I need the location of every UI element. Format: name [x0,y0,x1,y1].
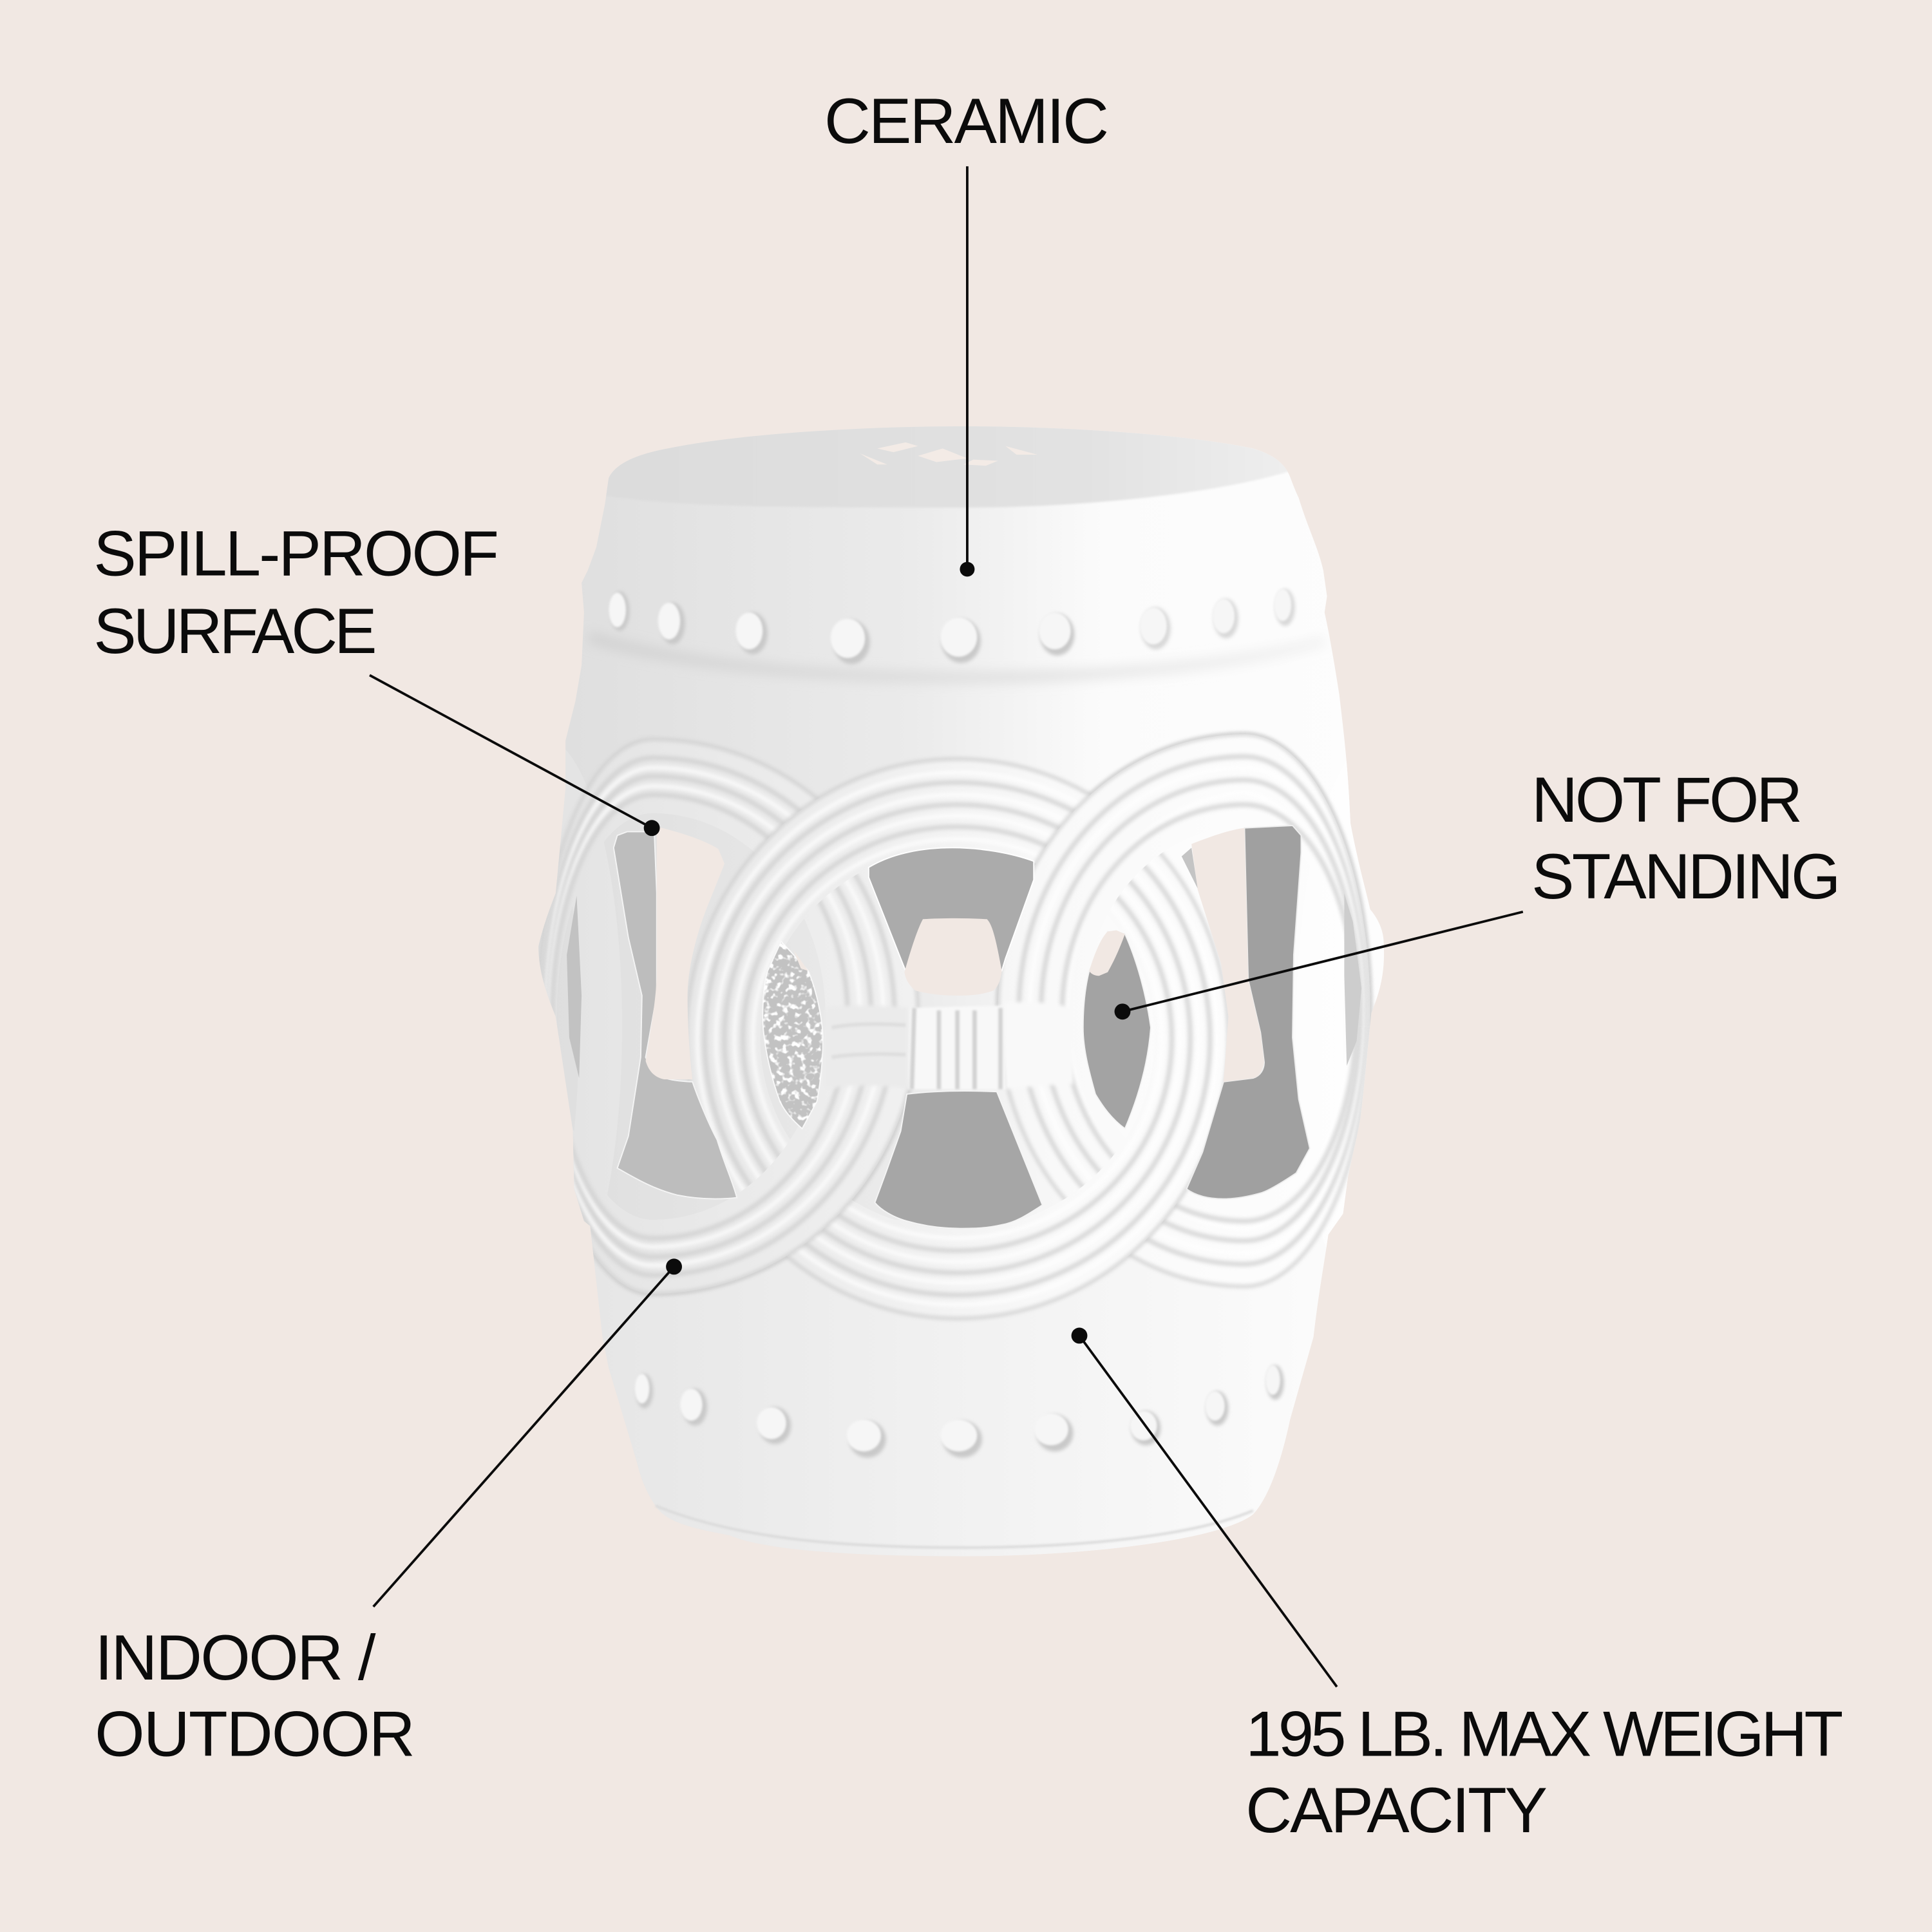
upper stud row [609,589,1295,664]
label: CAPACITY [1245,1775,1548,1846]
knot ribs [908,1005,1005,1089]
leader line [374,1267,674,1607]
stool body [538,426,1384,1556]
right opening (background seen through) [1191,828,1264,1082]
label: STANDING [1531,841,1841,913]
label: OUTDOOR [95,1698,415,1770]
right small interior sliver [1182,848,1198,888]
seat top surface [743,426,1287,507]
right ring over centre, upper [996,732,1373,1024]
leader line [370,675,652,828]
right lower interior [1186,826,1310,1199]
dot [644,820,660,836]
left lens interior [762,942,823,1129]
centre bottom interior [875,1091,1043,1229]
far left ring strand [542,737,622,1316]
seat vent slits [860,442,1037,466]
centre square opening [904,918,1001,996]
right lens glimpse [1089,931,1125,976]
product: white ceramic drum stool [538,419,1386,1565]
far left sliver [567,896,582,1078]
lower stud row [634,1365,1284,1457]
dot [1072,1328,1087,1343]
centre top interior [869,848,1034,971]
centre interlocking ring [687,759,1229,1318]
callout: 195 lb. max weight capacity [1072,1328,1843,1846]
upper ridge band [589,637,1325,677]
dot [1115,1003,1130,1019]
base rim [656,1506,1253,1548]
callout: spill-proof surface [93,518,660,836]
callout: indoor / outdoor [95,1258,682,1770]
far right sliver [1344,893,1361,1066]
left ring over centre, lower [732,1146,854,1256]
left opening (background seen through) [646,827,724,1079]
dot [960,562,974,576]
label: SPILL-PROOF [93,518,499,589]
right interlocking ring [998,734,1370,1286]
callout: ceramic [824,86,1109,576]
label: CERAMIC [824,86,1109,157]
left lower interior [614,831,737,1199]
left lens glimpse [793,950,808,971]
leader line [967,166,968,569]
left interlocking ring [540,738,920,1007]
knot band left [824,1005,908,1089]
openings seen through the stool [567,826,1361,1229]
far right ring strand [1296,737,1380,1316]
centre binding knot [824,1002,1073,1089]
leader line [1122,912,1523,1012]
interlocking rings belt [538,734,1380,1318]
callout: not for standing [1115,764,1841,1019]
label: 195 LB. MAX WEIGHT [1245,1698,1843,1770]
leader line [1079,1336,1337,1687]
knot band folds [831,1024,905,1057]
lower body shade [542,1220,1386,1565]
dot [666,1258,682,1274]
label: NOT FOR [1531,764,1803,836]
left lens glossy texture [762,942,823,1129]
label: SURFACE [93,596,377,667]
right lens interior [1083,931,1151,1129]
label: INDOOR / [95,1622,376,1694]
knot band right [1005,1002,1073,1089]
